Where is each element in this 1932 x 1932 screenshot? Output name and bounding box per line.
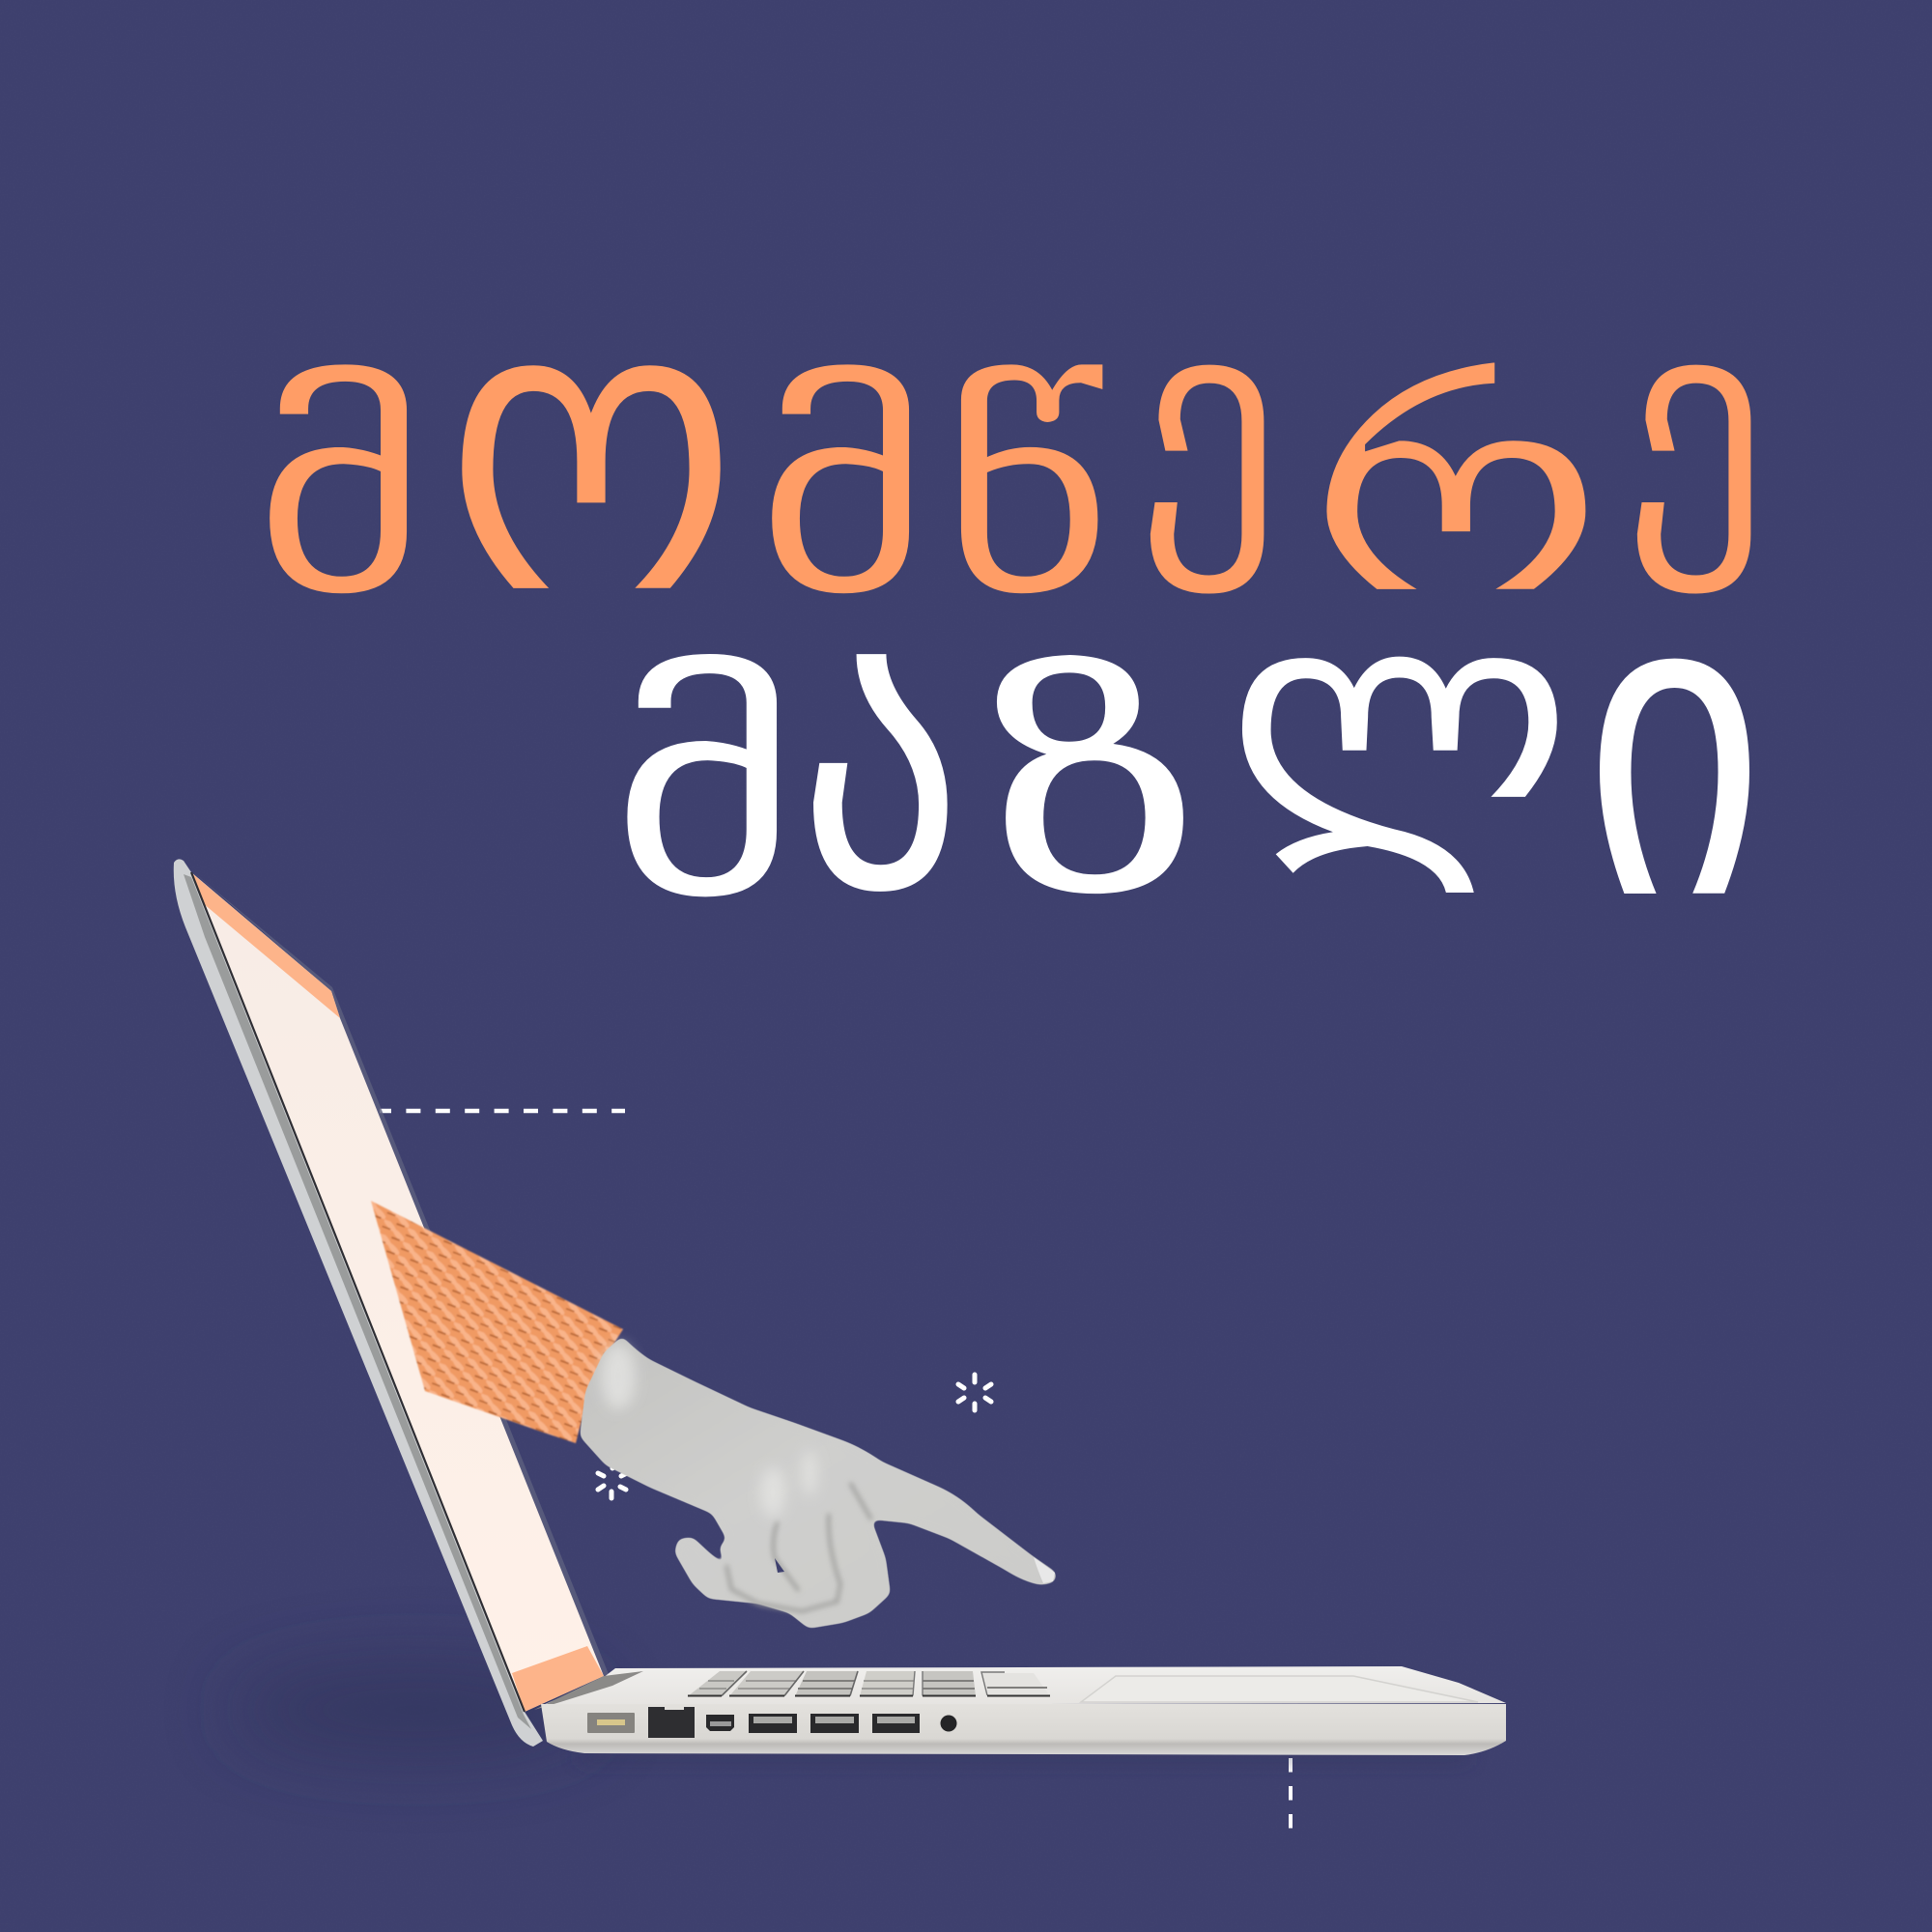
title line 2: white: ი [1582, 496, 1767, 996]
keyboard row 4 [860, 1671, 915, 1696]
port: ethernet [648, 1707, 695, 1738]
sparkle: right [958, 1375, 991, 1410]
title line 2: white: ლ [1227, 543, 1573, 895]
sparkle: left [598, 1461, 627, 1498]
screen band bottom [512, 1646, 604, 1712]
trackpad [1081, 1676, 1478, 1702]
title line 2: white: მ [610, 628, 800, 960]
hand silhouette [580, 1336, 1057, 1629]
laptop [174, 859, 1506, 1755]
keyboard row 2 [729, 1671, 804, 1696]
title line 2: white: ა [798, 523, 963, 979]
ports [587, 1707, 956, 1738]
hinge slot [534, 1671, 643, 1710]
port: audio [941, 1716, 956, 1731]
title line 1: orange: ე [1135, 252, 1282, 599]
knuckle highlights [601, 1344, 817, 1518]
finger creases [726, 1483, 871, 1611]
screen edge [191, 872, 525, 1712]
laptop front face [541, 1704, 1506, 1755]
title line 1: orange: წ [939, 339, 1114, 654]
port: usb 3 [872, 1714, 920, 1733]
title line 1: orange: რ [1307, 336, 1605, 655]
keyboard [688, 1671, 1050, 1696]
port: usb 1 [749, 1714, 797, 1733]
title line 1: orange: ე [1622, 252, 1769, 599]
title line 2: white [610, 496, 1767, 996]
dashed line: horizontal [380, 1109, 625, 1113]
keyboard row 6 [981, 1673, 1050, 1696]
title line 1: orange [252, 208, 1769, 687]
sleeve [371, 1201, 623, 1443]
dashed line: vertical [1289, 1758, 1293, 1830]
keyboard row 3 [795, 1671, 858, 1696]
laptop back rim [191, 870, 609, 1676]
title line 1: orange: მ [252, 339, 429, 654]
port: mini display [706, 1715, 734, 1731]
keyboard row 1 [688, 1671, 747, 1696]
laptop shadow [232, 1666, 1468, 1760]
title line 1: orange: მ [754, 339, 931, 654]
fingernail [1034, 1557, 1055, 1583]
hand [580, 1336, 1057, 1629]
finger gap [775, 1558, 784, 1573]
keyboard row 5 [923, 1671, 976, 1696]
laptop base top surface [543, 1666, 1506, 1705]
title line 2: white: ზ [988, 630, 1205, 956]
port: magsafe [587, 1713, 635, 1733]
lid shading band [184, 874, 531, 1729]
port: usb 2 [810, 1714, 859, 1733]
laptop lid shell [174, 859, 543, 1747]
screen band top [193, 874, 340, 1018]
title line 1: orange: ო [442, 208, 740, 687]
laptop screen [191, 872, 604, 1712]
